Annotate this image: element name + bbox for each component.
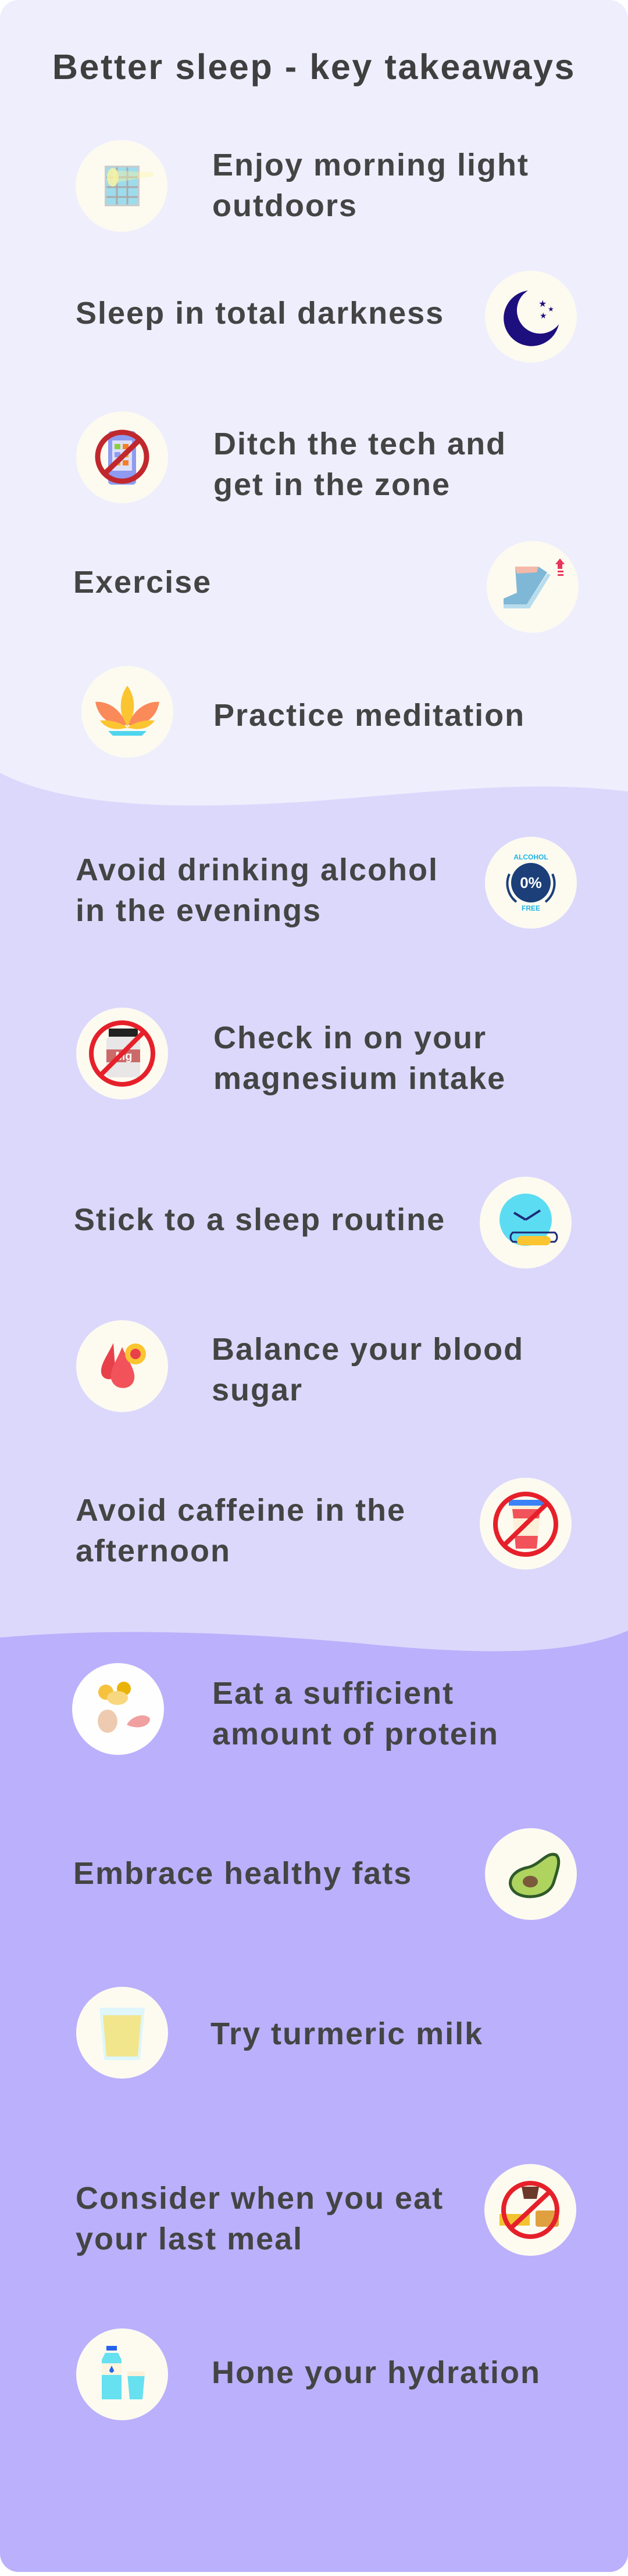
icon: alcohol free xyxy=(485,837,577,929)
text: your last meal xyxy=(76,2222,303,2256)
item: last meal xyxy=(76,2164,576,2256)
icon: glass of milk xyxy=(76,1987,168,2079)
text: Avoid drinking alcohol xyxy=(76,852,438,887)
text: Stick to a sleep routine xyxy=(74,1202,445,1237)
icon: window xyxy=(76,140,167,232)
item: ditch tech xyxy=(76,411,506,503)
icon: coffee prohibited xyxy=(480,1478,572,1570)
text xyxy=(212,1676,499,1751)
text: Sleep in total darkness xyxy=(76,296,444,331)
icon: avocado xyxy=(485,1828,577,1920)
icon: alcohol free: ALCOHOL xyxy=(513,853,548,861)
icon: food prohibited xyxy=(484,2164,576,2256)
item: meditation xyxy=(81,666,525,758)
item: healthy fats xyxy=(73,1828,577,1920)
item: blood sugar xyxy=(76,1320,524,1412)
icon: protein foods xyxy=(72,1663,164,1755)
item: turmeric milk xyxy=(76,1987,483,2079)
text: Practice meditation xyxy=(213,698,525,733)
item: darkness xyxy=(76,271,577,363)
text xyxy=(76,852,438,928)
text: Hone your hydration xyxy=(212,2355,541,2390)
icon: lotus xyxy=(81,666,173,758)
text: magnesium intake xyxy=(213,1061,506,1096)
item: exercise xyxy=(73,541,579,633)
title: Better sleep - key takeaways xyxy=(52,47,576,87)
text: in the evenings xyxy=(76,893,322,928)
item: hydration xyxy=(76,2328,541,2420)
text: sugar xyxy=(212,1373,303,1407)
text: Embrace healthy fats xyxy=(73,1856,412,1891)
text: Avoid caffeine in the xyxy=(76,1493,406,1528)
item: protein xyxy=(72,1663,499,1755)
text: Eat a sufficient xyxy=(212,1676,454,1711)
text: Ditch the tech and xyxy=(213,427,506,461)
item: morning light xyxy=(76,140,529,232)
icon: moon: ★ xyxy=(540,311,547,320)
icon: blood drops xyxy=(76,1320,168,1412)
icon: moon xyxy=(485,271,577,363)
icon: moon: ★ xyxy=(548,305,554,313)
icon: alcohol free: 0% xyxy=(520,874,542,891)
item: caffeine xyxy=(76,1478,572,1570)
item: alcohol xyxy=(76,837,577,929)
text: Try turmeric milk xyxy=(210,2016,483,2051)
text xyxy=(213,1020,506,1096)
text: outdoors xyxy=(212,188,358,223)
icon: water bottle and glass xyxy=(76,2328,168,2420)
text: Balance your blood xyxy=(212,1332,524,1367)
icon: phone prohibited xyxy=(76,411,168,503)
text xyxy=(212,1332,524,1407)
item: magnesium xyxy=(76,1008,506,1099)
text xyxy=(212,148,529,223)
text: get in the zone xyxy=(213,467,451,502)
icon: shoe xyxy=(487,541,579,633)
text: Enjoy morning light xyxy=(212,148,529,182)
text: Check in on your xyxy=(213,1020,487,1055)
icon: magnesium prohibited: Mg xyxy=(116,1050,132,1063)
text xyxy=(213,427,506,502)
icon: moon: ★ xyxy=(538,299,547,309)
text: Exercise xyxy=(73,565,212,600)
text: afternoon xyxy=(76,1534,231,1568)
text xyxy=(76,2181,444,2256)
icon: alcohol free: FREE xyxy=(522,904,540,912)
icon: clock with mask xyxy=(480,1177,572,1269)
text: Consider when you eat xyxy=(76,2181,444,2216)
icon: magnesium prohibited xyxy=(76,1008,168,1099)
item: routine xyxy=(74,1177,572,1269)
text xyxy=(76,1493,406,1568)
text: amount of protein xyxy=(212,1717,499,1751)
